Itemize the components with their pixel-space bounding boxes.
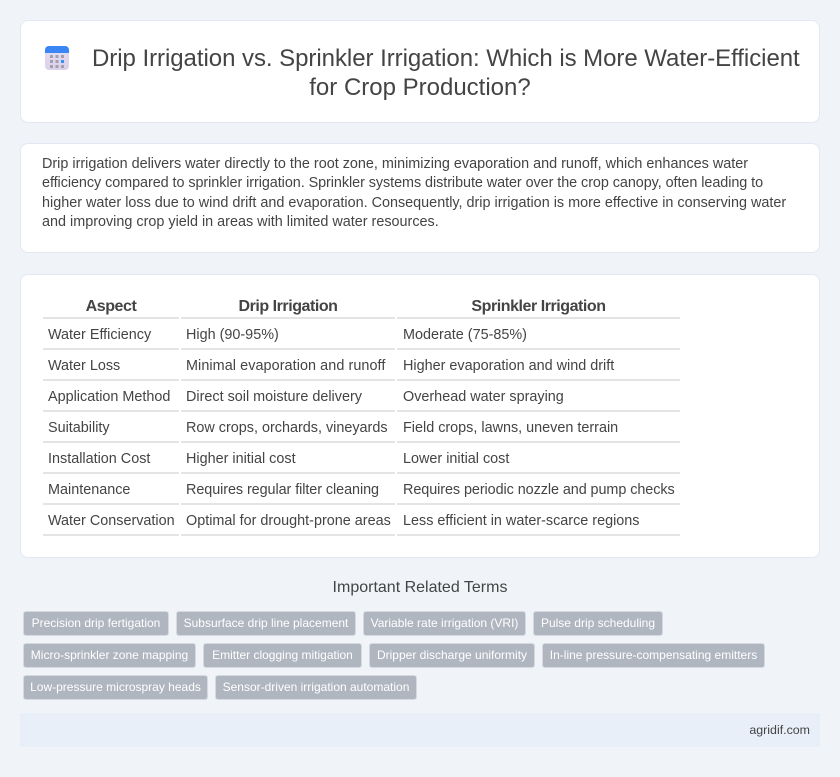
related terms tags: In-line pressure-compensating emitters (550, 648, 757, 662)
comparison table: Sprinkler Irrigation (471, 298, 606, 315)
comparison table: Direct soil moisture delivery (186, 389, 362, 405)
related terms tags: Subsurface drip line placement (184, 616, 348, 630)
comparison table: Less efficient in water-scarce regions (403, 513, 640, 529)
related terms tags: Variable rate irrigation (VRI) (371, 616, 518, 630)
related terms tags: Dripper discharge uniformity (377, 648, 527, 662)
comparison table: Optimal for drought-prone areas (186, 513, 391, 529)
summary text: efficiency compared to sprinkler irrigation. Sprinkler systems distribute water over the crop canopy, often leading to (42, 175, 763, 191)
comparison table: Minimal evaporation and runoff (186, 358, 385, 374)
icon: calendar (45, 46, 69, 70)
comparison table: Field crops, lawns, uneven terrain (403, 420, 618, 436)
summary panel (20, 143, 820, 253)
related terms tags: Micro-sprinkler zone mapping (31, 648, 188, 662)
comparison table: Water Efficiency (48, 327, 151, 343)
comparison table (43, 298, 680, 536)
footer site name: agridif.com (749, 723, 810, 737)
title (92, 45, 800, 101)
related terms tags: Low-pressure microspray heads (30, 680, 201, 694)
comparison table: Moderate (75-85%) (403, 327, 527, 343)
related terms tags: Emitter clogging mitigation (212, 648, 353, 662)
comparison table: Suitability (48, 420, 110, 436)
related terms tags: Sensor-driven irrigation automation (223, 680, 409, 694)
comparison table: Application Method (48, 389, 170, 405)
comparison table: Maintenance (48, 482, 130, 498)
comparison table: Requires periodic nozzle and pump checks (403, 482, 675, 498)
summary text (42, 156, 786, 230)
summary text: and improving crop yield in areas with limited water resources. (42, 214, 439, 230)
title: Drip Irrigation vs. Sprinkler Irrigation: Which is More Water-Efficient (92, 45, 800, 72)
footer bar (20, 713, 820, 747)
comparison table: Water Loss (48, 358, 120, 374)
comparison table: Aspect (86, 298, 136, 315)
comparison table: Overhead water spraying (403, 389, 564, 405)
comparison table: High (90-95%) (186, 327, 279, 343)
summary text: Drip irrigation delivers water directly to the root zone, minimizing evaporation and runoff, which enhances water (42, 156, 748, 172)
header panel (20, 20, 820, 123)
comparison table: Water Conservation (48, 513, 175, 529)
comparison table: Drip Irrigation (238, 298, 338, 315)
table panel (20, 274, 820, 558)
related terms tags: Pulse drip scheduling (541, 616, 655, 630)
title: for Crop Production? (309, 74, 531, 101)
related terms heading: Important Related Terms (333, 579, 507, 596)
comparison table: Installation Cost (48, 451, 150, 467)
comparison table: Higher initial cost (186, 451, 296, 467)
summary text: higher water loss due to wind drift and evaporation. Consequently, drip irrigation is more effective in conserving water (42, 195, 786, 211)
comparison table: Higher evaporation and wind drift (403, 358, 614, 374)
related terms tags (23, 611, 765, 700)
comparison table: Lower initial cost (403, 451, 509, 467)
comparison table: Requires regular filter cleaning (186, 482, 379, 498)
comparison table: Row crops, orchards, vineyards (186, 420, 388, 436)
related terms tags: Precision drip fertigation (32, 616, 160, 630)
